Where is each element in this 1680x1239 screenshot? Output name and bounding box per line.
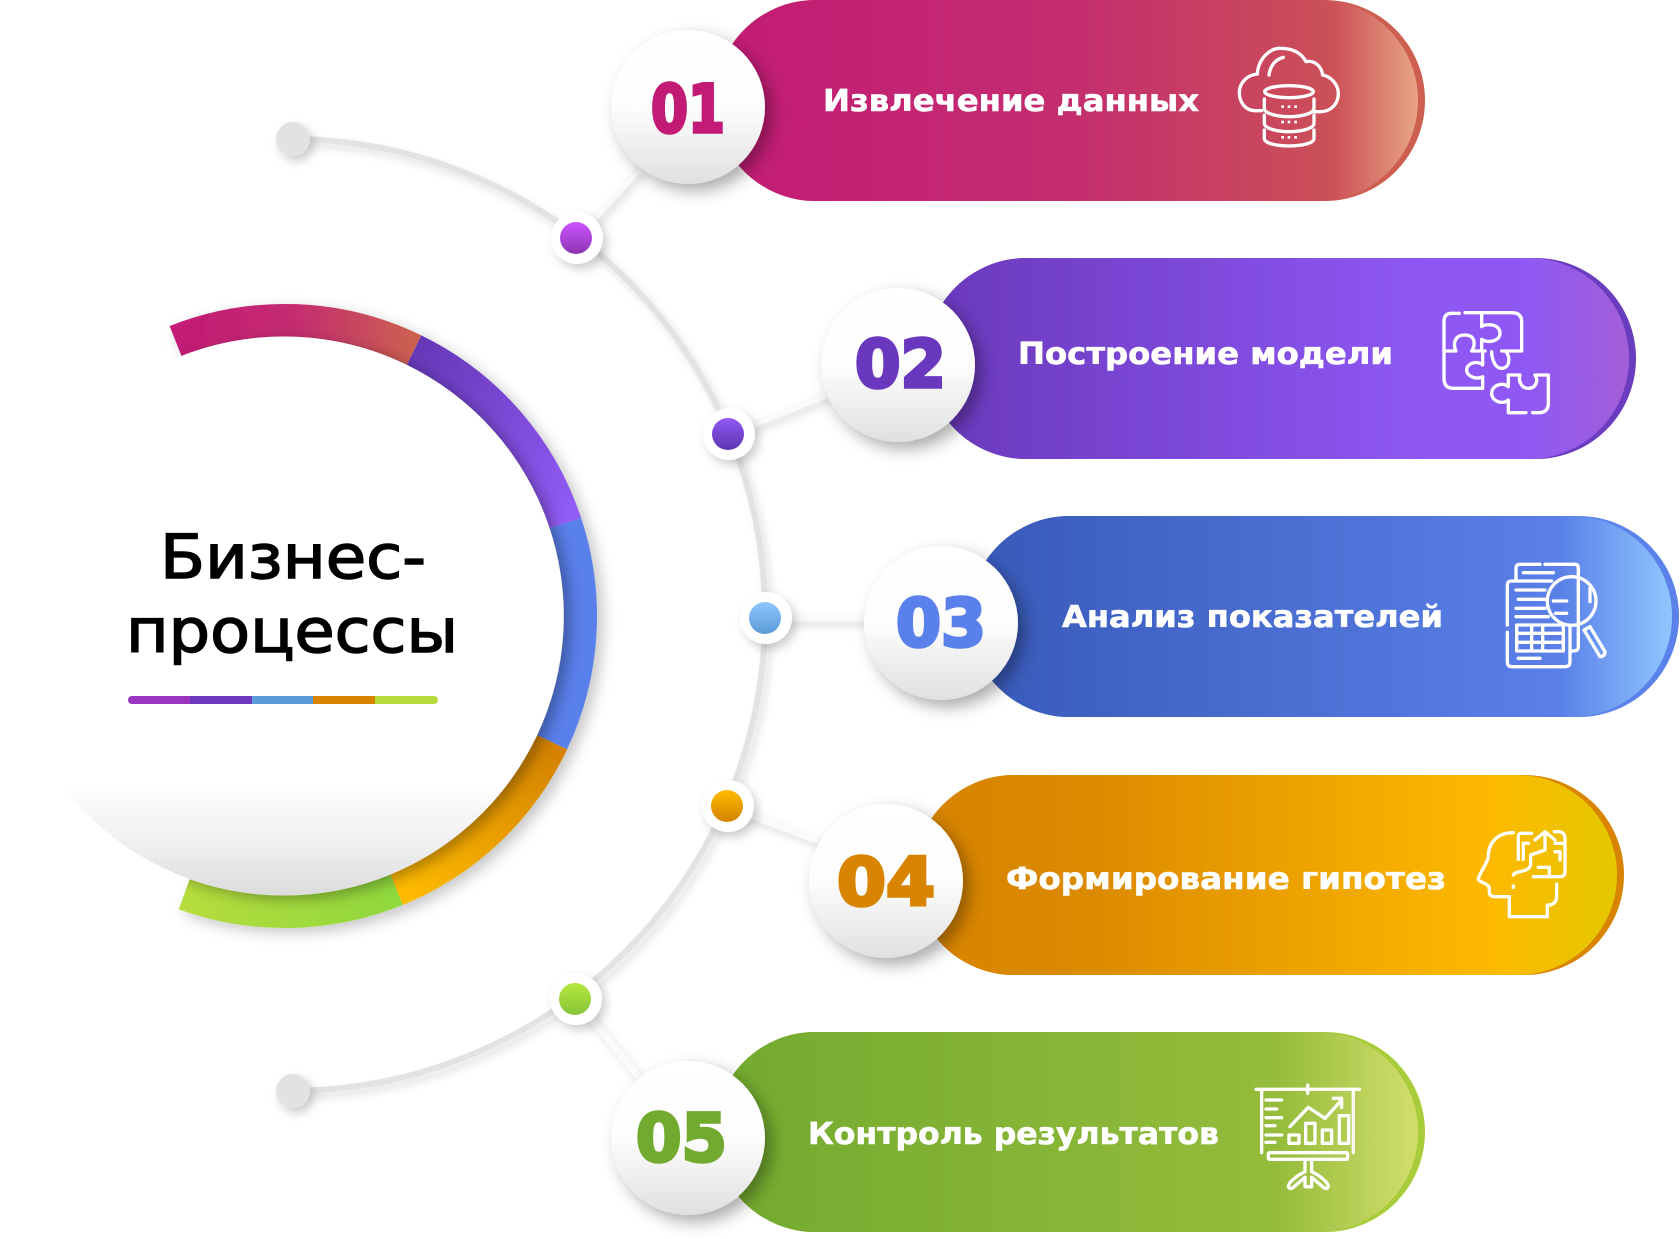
number badge 04: 04 <box>837 844 935 921</box>
label 2: Построение модели <box>1018 337 1393 372</box>
icon: cloud database <box>1239 48 1338 146</box>
title <box>126 522 458 667</box>
central white circle <box>4 336 564 896</box>
number badge 01: 01 <box>651 71 725 148</box>
title: процессы <box>126 596 458 667</box>
number badge 04 <box>809 804 963 958</box>
number badge 02: 02 <box>855 326 946 403</box>
ring segment 3 <box>552 523 580 742</box>
number badge 05: 05 <box>636 1100 727 1177</box>
pill 4 <box>914 775 1624 975</box>
node 2 <box>703 408 755 460</box>
label 3: Анализ показателей <box>1062 600 1443 635</box>
icon: report with magnifier <box>1507 564 1605 667</box>
node 4 <box>702 780 754 832</box>
ring segment 5 <box>184 890 397 912</box>
central ring <box>176 320 580 912</box>
timeline arc <box>289 139 765 1091</box>
central circle shadow on ring <box>182 334 578 907</box>
node 1 <box>551 212 603 264</box>
label 1: Извлечение данных <box>823 84 1199 119</box>
arc end dot <box>276 1074 310 1108</box>
number badge 03 <box>864 546 1018 700</box>
number badge 03: 03 <box>896 585 986 662</box>
connectors <box>575 167 870 1078</box>
pill 3 <box>969 516 1679 717</box>
number badge 05 <box>611 1061 765 1215</box>
label 5: Контроль результатов <box>808 1117 1219 1152</box>
label 4: Формирование гипотез <box>1006 862 1446 897</box>
arc start dot <box>276 122 310 156</box>
number badge 01 <box>611 30 765 184</box>
title underline <box>128 696 438 704</box>
number badge 02 <box>821 288 975 442</box>
node 5 <box>550 973 602 1025</box>
pill 5 <box>715 1032 1425 1232</box>
pill 2 <box>926 258 1636 459</box>
icon: head with maze <box>1478 832 1565 917</box>
ring segment 4 <box>397 742 552 890</box>
icon: presentation chart <box>1256 1085 1359 1189</box>
ring segment 2 <box>414 350 566 523</box>
pill 1 <box>715 0 1425 201</box>
node 3 <box>740 592 792 644</box>
icon: puzzle <box>1444 313 1548 413</box>
ring segment 1 <box>176 320 414 350</box>
title: Бизнес- <box>160 522 426 593</box>
